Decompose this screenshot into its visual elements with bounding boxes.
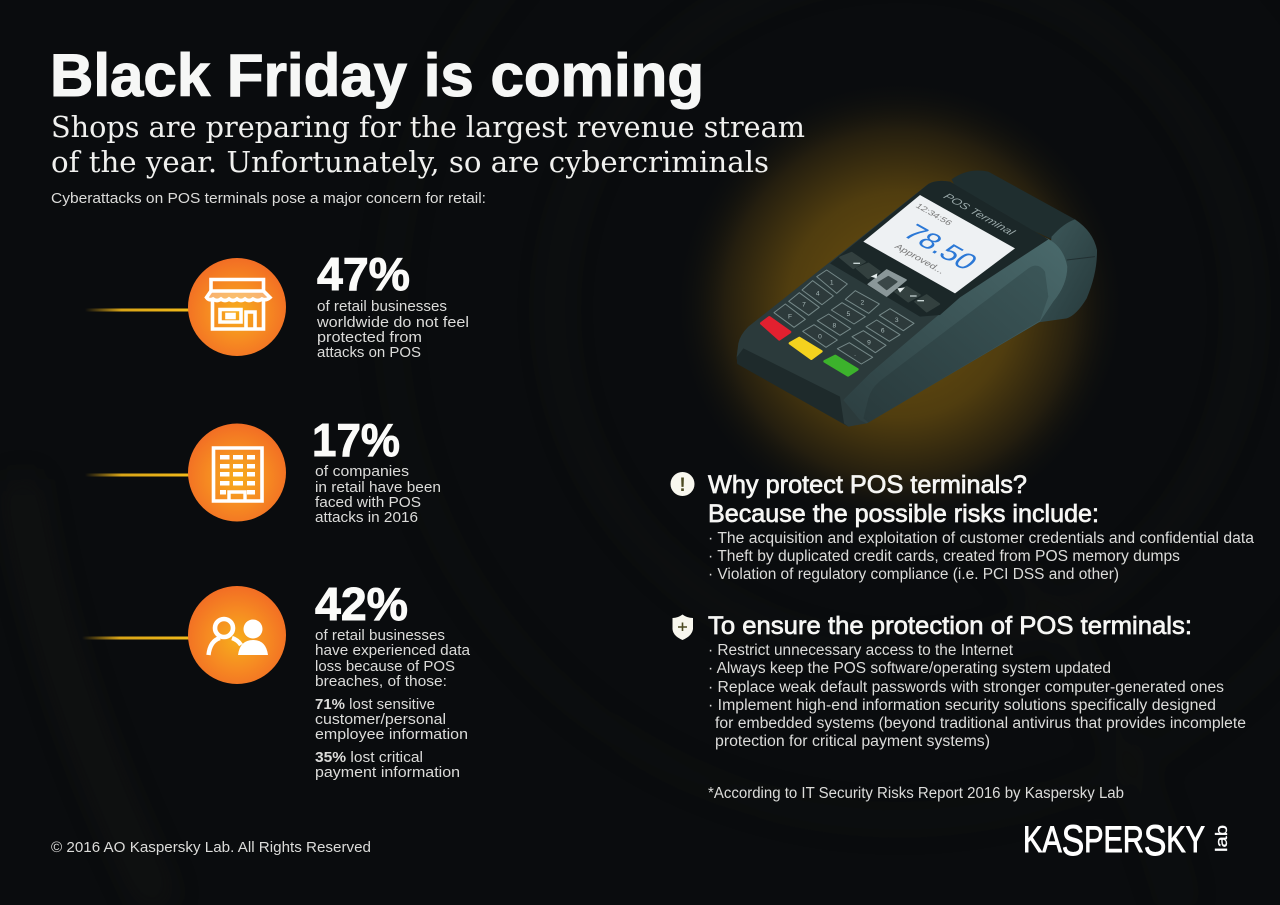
section: why protect POS terminals — [670, 471, 1254, 583]
key labels: 4 — [816, 290, 820, 297]
risk list: · Theft by duplicated credit cards, created from POS memory dumps — [708, 548, 1180, 565]
breakdown: 71 percent — [315, 696, 468, 743]
screen — [863, 195, 1015, 293]
icon: exclamation: ! — [679, 475, 686, 496]
function keys — [761, 317, 857, 375]
arched band — [843, 237, 1067, 423]
heading: Why protect POS terminals? — [708, 471, 1027, 499]
breakdown: 71 percent: employee information — [315, 726, 468, 743]
key labels: 5 — [846, 311, 850, 318]
stat text: loss because of POS — [315, 658, 455, 675]
stat text: protected from — [317, 329, 422, 346]
heading: Because the possible risks include: — [708, 500, 1099, 528]
subtitle — [51, 110, 805, 179]
key labels: 8 — [832, 323, 836, 330]
key labels: 2 — [860, 299, 864, 306]
head bezel — [830, 181, 1048, 317]
breakdown: 35 percent — [315, 749, 460, 781]
breakdown: 71 percent: customer/personal — [315, 711, 446, 728]
icon: office building — [188, 424, 286, 522]
protection list: · Restrict unnecessary access to the Internet — [708, 642, 1014, 659]
stat text: breaches, of those: — [315, 673, 447, 690]
POS terminal illustration — [737, 171, 1097, 427]
title: Black Friday is coming — [50, 42, 704, 109]
roller seam — [1067, 257, 1095, 260]
logo: Kaspersky Lab: lab — [1212, 825, 1231, 852]
navigation keys — [840, 253, 939, 312]
icon: shop — [188, 258, 286, 356]
stat text: of retail businesses — [315, 627, 445, 644]
intro line: Cyberattacks on POS terminals pose a major concern for retail: — [51, 190, 486, 207]
terminal body — [737, 181, 1067, 427]
subtitle: Shops are preparing for the largest revenue stream — [51, 110, 805, 144]
breakdown: 35 percent: 35% lost critical — [315, 749, 423, 766]
icon: people — [188, 586, 286, 684]
breakdown: 71 percent: 71% lost sensitive — [315, 696, 435, 713]
logo: Kaspersky Lab: S — [1144, 817, 1166, 865]
brand label: POS Terminal — [941, 192, 1017, 238]
stat text: of companies — [315, 463, 409, 480]
screen text: Approved... — [892, 243, 947, 276]
protection list: for embedded systems (beyond traditional antivirus that provides incomplete — [715, 715, 1246, 732]
stat number: 17% — [312, 414, 400, 466]
stat text — [315, 463, 441, 526]
stat text — [316, 298, 469, 361]
stat number: 42% — [315, 578, 408, 630]
stat: 17 percent — [85, 414, 441, 526]
screen text: 12:34:56 — [914, 202, 954, 227]
protection list — [708, 642, 1246, 750]
stat: 42 percent — [82, 578, 471, 781]
stat text: attacks on POS — [317, 344, 421, 361]
stat text: attacks in 2016 — [315, 509, 418, 526]
stat text: in retail have been — [315, 479, 441, 496]
protection list: · Replace weak default passwords with stronger computer-generated ones — [708, 679, 1224, 696]
logo: Kaspersky Lab: S — [1062, 817, 1084, 865]
stat text: faced with POS — [315, 494, 421, 511]
copyright: © 2016 AO Kaspersky Lab. All Rights Reserved — [51, 839, 371, 856]
key labels: 1 — [830, 279, 834, 286]
logo: Kaspersky Lab: KY — [1166, 819, 1205, 860]
key labels: . — [854, 351, 856, 358]
icon: exclamation — [670, 472, 694, 496]
stat: 47 percent — [85, 248, 469, 361]
key labels: 9 — [867, 339, 871, 346]
side panel — [863, 266, 1048, 423]
logo: Kaspersky Lab — [1023, 817, 1231, 865]
front lip — [737, 348, 848, 427]
key labels: 6 — [881, 328, 885, 335]
subtitle: of the year. Unfortunately, so are cybercriminals — [51, 145, 769, 179]
key labels: 7 — [802, 302, 806, 309]
risk list: · The acquisition and exploitation of customer credentials and confidential data — [708, 530, 1254, 547]
logo: Kaspersky Lab: PER — [1084, 819, 1144, 860]
stat text: have experienced data — [315, 642, 471, 659]
key labels: F — [788, 313, 792, 320]
section: ensure protection — [672, 612, 1246, 750]
key labels — [788, 279, 899, 358]
protection list: · Implement high-end information security solutions specifically designed — [708, 697, 1216, 714]
key labels: 3 — [895, 317, 899, 324]
heading: To ensure the protection of POS terminals: — [708, 612, 1192, 640]
stat text — [315, 627, 471, 690]
source note: *According to IT Security Risks Report 2016 by Kaspersky Lab — [708, 785, 1124, 802]
keypad — [774, 270, 914, 364]
breakdown: 35 percent: payment information — [315, 764, 460, 781]
screen text: 78.50 — [896, 220, 984, 275]
protection list: protection for critical payment systems) — [715, 733, 990, 750]
protection list: · Always keep the POS software/operating system updated — [708, 660, 1111, 677]
logo: Kaspersky Lab: KA — [1023, 819, 1072, 860]
roller end cap — [1038, 219, 1097, 322]
risk list — [708, 530, 1254, 583]
stat number: 47% — [317, 248, 410, 300]
stat text: of retail businesses — [317, 298, 447, 315]
stat text: worldwide do not feel — [316, 314, 469, 331]
key labels: 0 — [818, 333, 822, 340]
risk list: · Violation of regulatory compliance (i.e. PCI DSS and other) — [708, 566, 1119, 583]
heading — [708, 471, 1099, 528]
printer roller — [952, 171, 1075, 240]
icon: shield — [672, 614, 693, 640]
